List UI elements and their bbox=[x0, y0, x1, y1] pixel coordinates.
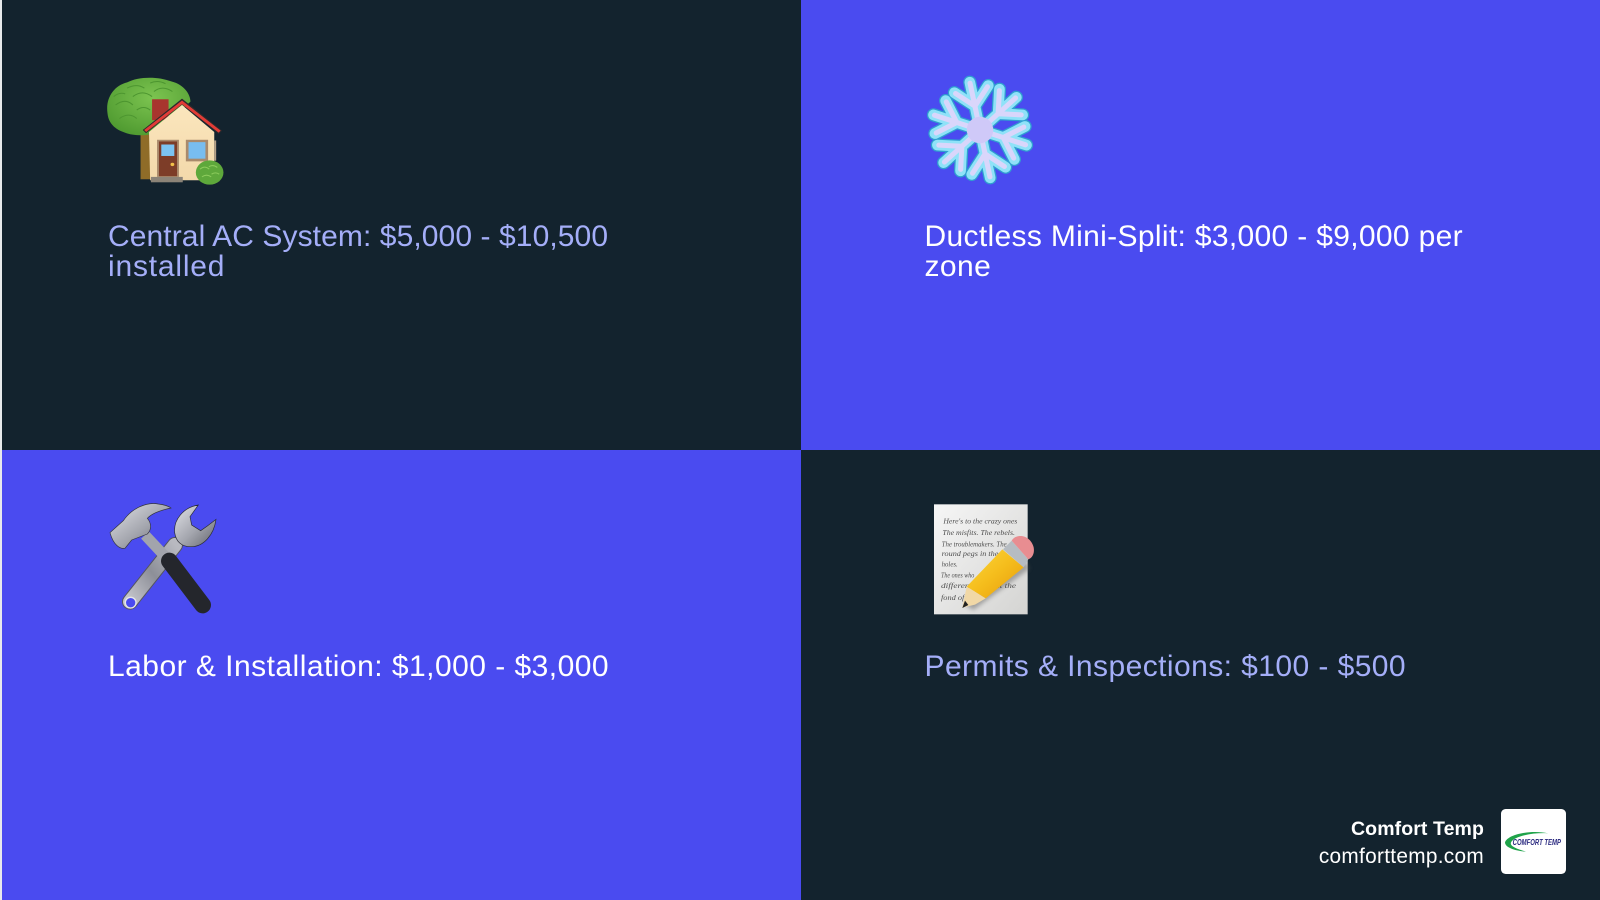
icon: house with tree bbox=[107, 78, 224, 185]
logo card bbox=[1500, 809, 1566, 874]
panel: permits and inspections bbox=[801, 450, 1600, 900]
text: central AC cost: installed bbox=[108, 250, 225, 283]
panel: central AC system bbox=[2, 0, 801, 450]
panel: ductless mini-split bbox=[801, 0, 1600, 450]
text: central AC cost bbox=[108, 220, 608, 283]
logo card: COMFORT TEMP bbox=[1513, 837, 1561, 847]
icon: memo with pencil: Here's to the crazy ones bbox=[942, 517, 1017, 526]
brand text bbox=[1319, 818, 1484, 868]
icon: memo with pencil: The troublemakers. The bbox=[942, 540, 1007, 549]
icon: snowflake bbox=[926, 76, 1034, 184]
panel: labor and installation bbox=[2, 450, 801, 900]
text: mini-split cost bbox=[924, 220, 1463, 283]
icon: hammer and wrench bbox=[110, 503, 216, 614]
text: central AC cost: Central AC System: $5,000 - $10,500 bbox=[108, 220, 608, 253]
icon: memo with pencil bbox=[934, 504, 1034, 614]
text: permit cost: Permits & Inspections: $100 - $500 bbox=[924, 650, 1406, 683]
brand text: comforttemp.com bbox=[1319, 844, 1484, 868]
icon: memo with pencil: The misfits. The rebels. bbox=[942, 528, 1015, 537]
text: labor cost: Labor & Installation: $1,000 - $3,000 bbox=[108, 650, 609, 683]
brand text: Comfort Temp bbox=[1351, 818, 1484, 840]
icon: memo with pencil: differently about the bbox=[941, 581, 1017, 590]
icon: memo with pencil: fond of bbox=[941, 593, 966, 602]
icon: memo with pencil: round pegs in the bbox=[942, 549, 999, 558]
icon: memo with pencil: The ones who bbox=[941, 570, 974, 579]
text: mini-split cost: Ductless Mini-Split: $3,000 - $9,000 per bbox=[924, 220, 1463, 253]
text: mini-split cost: zone bbox=[924, 250, 991, 283]
icon: memo with pencil: holes. bbox=[942, 559, 958, 568]
